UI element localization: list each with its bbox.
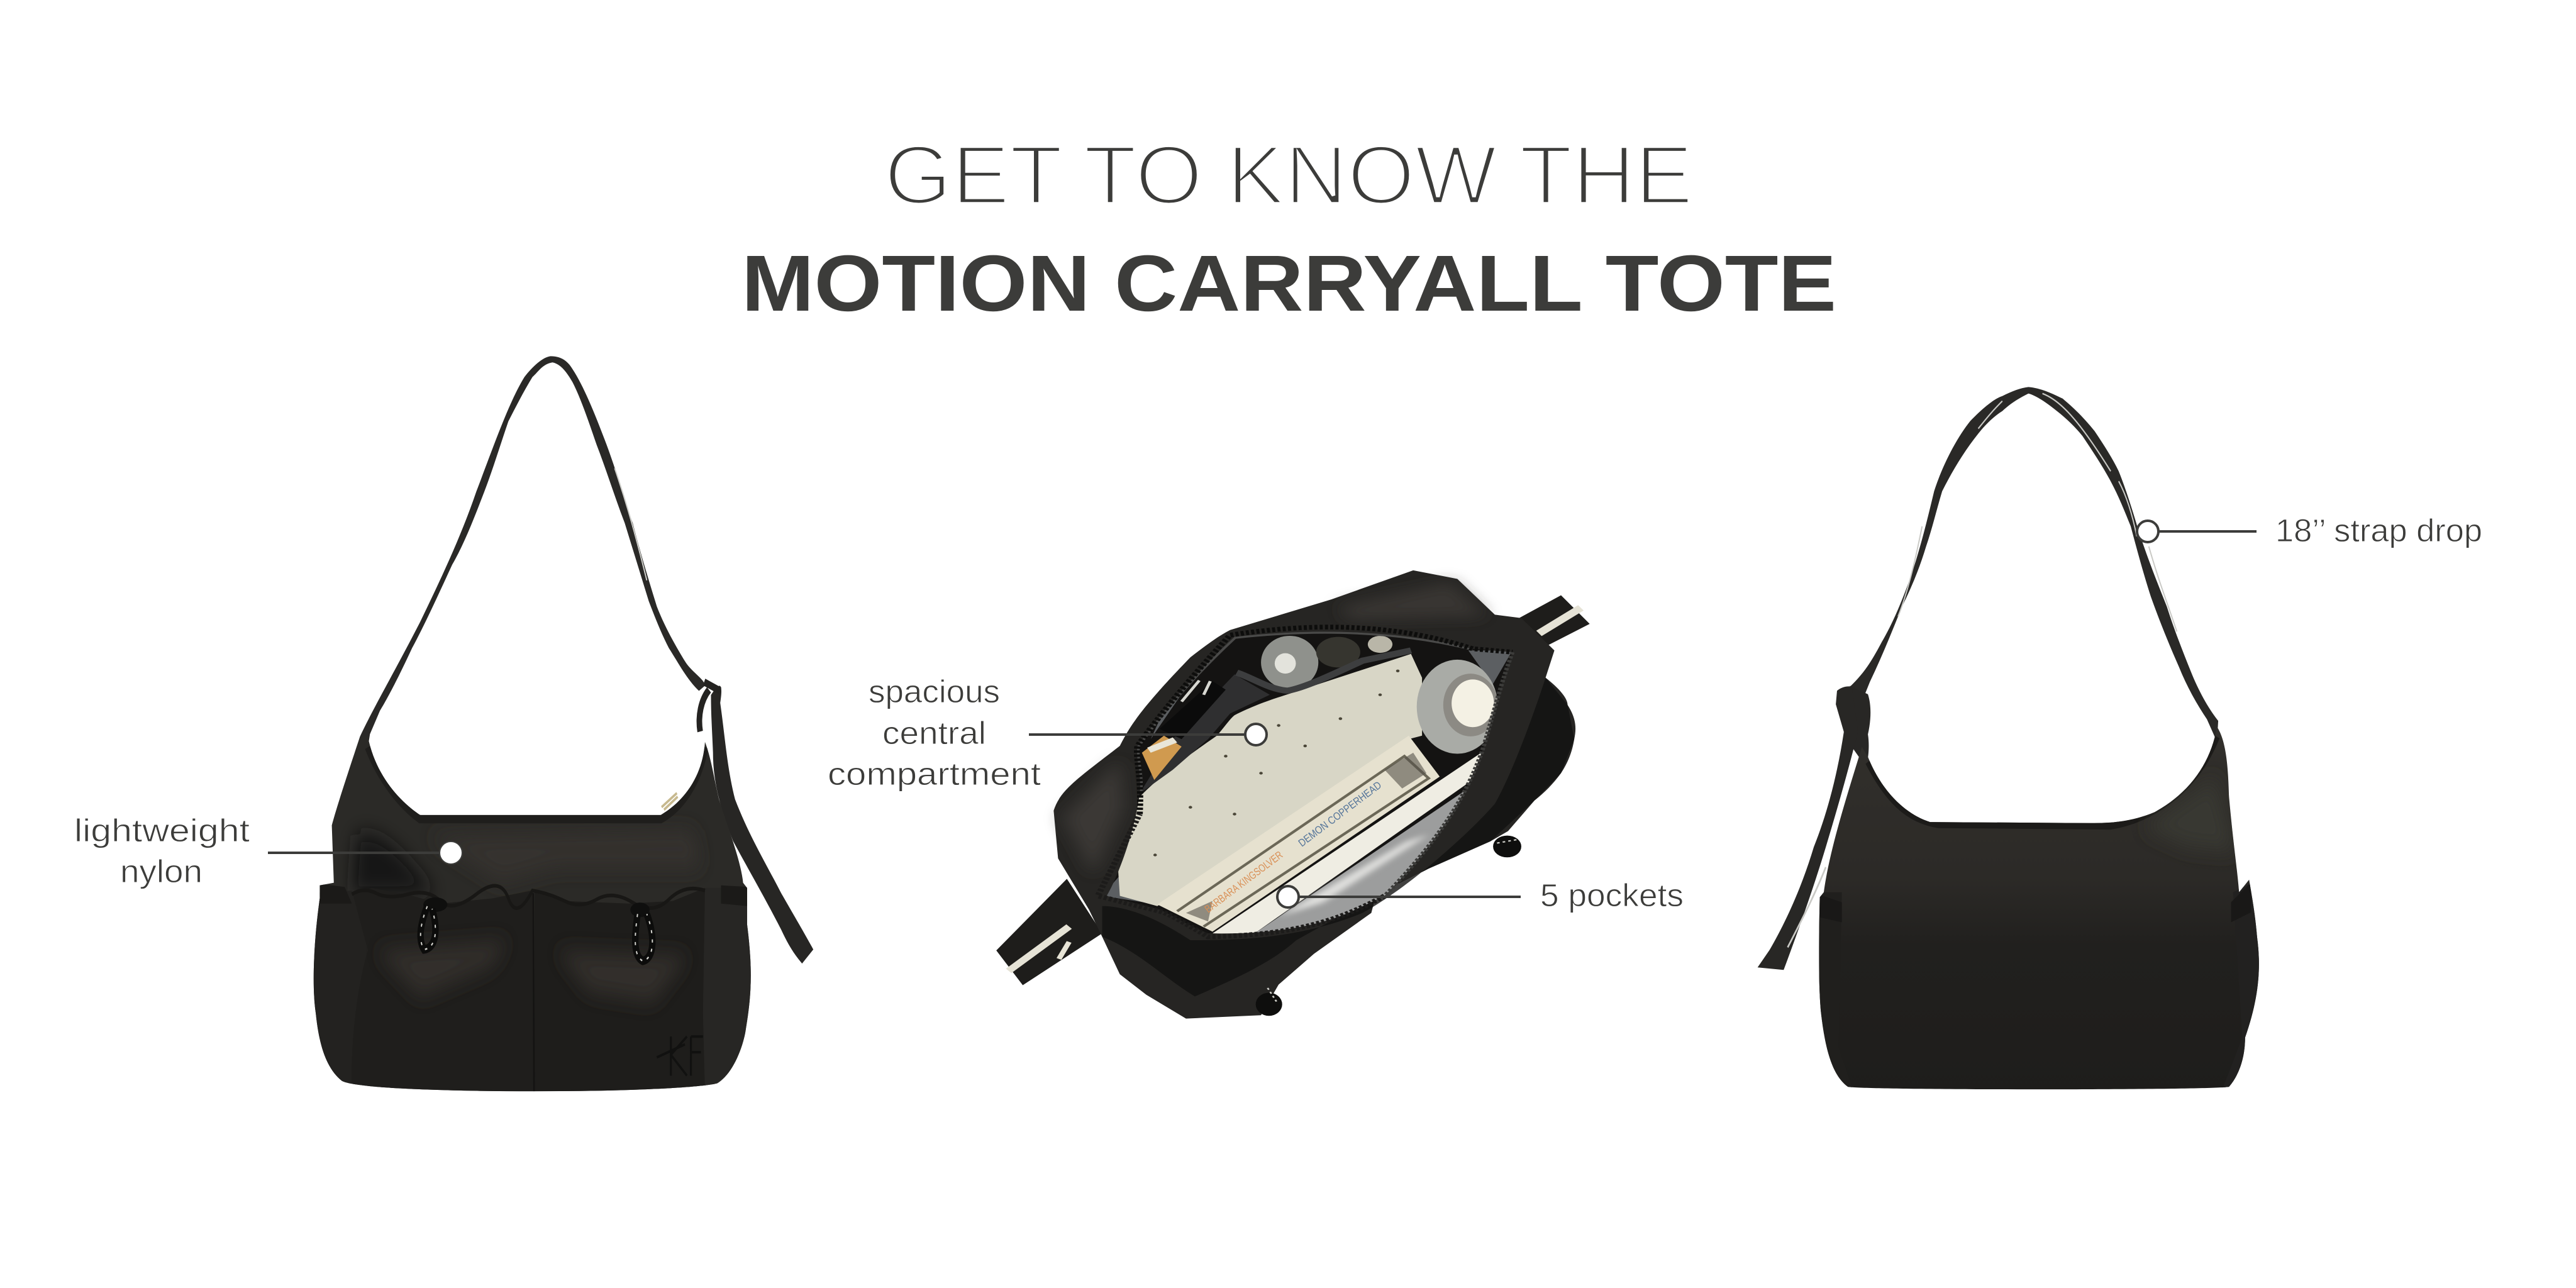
strap connector (1850, 686, 1870, 767)
sweater speckles (1153, 670, 1399, 857)
thermos (1417, 660, 1498, 754)
interior (1098, 623, 1521, 940)
marker (1245, 724, 1267, 745)
label: 5 pockets (1540, 877, 1684, 913)
pocket seam (533, 893, 534, 1091)
paper stack (1213, 751, 1484, 935)
strap tail (1758, 686, 1858, 970)
right side panel (2223, 884, 2259, 1088)
card clip (1182, 680, 1210, 702)
left pocket (351, 888, 535, 1094)
right toggle and cord (630, 902, 652, 961)
label (828, 674, 1041, 792)
label: compartment (828, 756, 1041, 792)
outer shell (1053, 570, 1575, 1019)
zipper tape (1137, 631, 1473, 794)
side elastic (1820, 882, 2251, 923)
bag: back view (1758, 387, 2267, 1098)
zipper top (1137, 627, 1513, 814)
left strap (996, 879, 1102, 985)
marker (440, 841, 462, 864)
leader line (2158, 530, 2257, 533)
left toggle and cord (421, 897, 447, 950)
sweater (1118, 654, 1422, 906)
lining (1102, 643, 1513, 902)
callout: spacious central compartment (828, 674, 1267, 792)
body light panel (463, 837, 691, 874)
pocket fold highlights (376, 940, 689, 1002)
toggle bottom (1256, 988, 1282, 1016)
zipper right (1385, 652, 1513, 896)
bag: front view (308, 356, 813, 1096)
right strap (1519, 595, 1590, 645)
zipper pull (662, 793, 678, 810)
leader line (1299, 896, 1521, 898)
tail stripe (1788, 867, 1826, 947)
callout: 18 inch strap drop (2137, 513, 2482, 548)
label: lightweight (74, 813, 250, 848)
label: nylon (120, 853, 203, 889)
gold item (1142, 736, 1182, 780)
strap (360, 356, 705, 747)
bag: open top view (996, 570, 1590, 1019)
bottle small (1368, 636, 1392, 653)
zipper bottom (1098, 814, 1385, 937)
right strap stripe (1539, 608, 1581, 633)
book titles: DEMON COPPERHEAD (1296, 779, 1384, 849)
body shadow (352, 834, 436, 893)
label: 18’’ strap drop (2275, 513, 2482, 548)
upper seam shadow (1868, 737, 2217, 826)
callout: 5 pockets (1277, 877, 1684, 913)
left side panel (1819, 892, 1852, 1087)
title (741, 129, 1836, 328)
book (1157, 736, 1440, 931)
label: central (882, 715, 986, 751)
shell dark lower fabric (1102, 678, 1574, 996)
shell left light (1062, 760, 1124, 875)
left side pocket (313, 893, 352, 1084)
mesh organiser (1140, 674, 1270, 794)
laptop highlight (1279, 835, 1429, 916)
pocket elastic (319, 884, 748, 906)
right pocket (535, 888, 707, 1094)
strap knot (699, 682, 720, 731)
leader line (1029, 733, 1245, 736)
body (308, 726, 761, 1097)
shell top light (1340, 582, 1486, 620)
logo mark (657, 1036, 703, 1075)
book corner art (1186, 753, 1426, 921)
book titles (1202, 779, 1384, 915)
marker (2137, 521, 2158, 542)
bottle dark (1316, 637, 1360, 667)
bottle top (1261, 636, 1318, 689)
book titles: BARBARA KINGSOLVER (1202, 849, 1285, 915)
label (74, 813, 250, 889)
upper side light (2151, 789, 2235, 854)
strap tail (711, 686, 813, 963)
pocket ruffle (352, 884, 706, 903)
marker (1277, 886, 1299, 908)
title line 1: GET TO KNOW THE (884, 129, 1693, 222)
book border (1177, 756, 1429, 926)
opening trim (368, 747, 705, 819)
laptop (1252, 787, 1470, 935)
strap highlight (614, 469, 647, 580)
body (1810, 717, 2267, 1098)
organiser inside (1160, 681, 1226, 739)
zip pull (1059, 942, 1069, 959)
toggle right (1493, 836, 1521, 857)
title line 2: MOTION CARRYALL TOTE (741, 238, 1836, 328)
right pocket corner (703, 904, 751, 1085)
strap highlights (1898, 394, 2177, 631)
label: spacious (869, 674, 1000, 709)
leader line (268, 852, 440, 854)
mesh top strip (1236, 650, 1411, 691)
callout: lightweight nylon (74, 813, 462, 889)
gold label (1147, 737, 1177, 753)
left strap stripe (1009, 926, 1069, 971)
strap (1850, 387, 2218, 742)
